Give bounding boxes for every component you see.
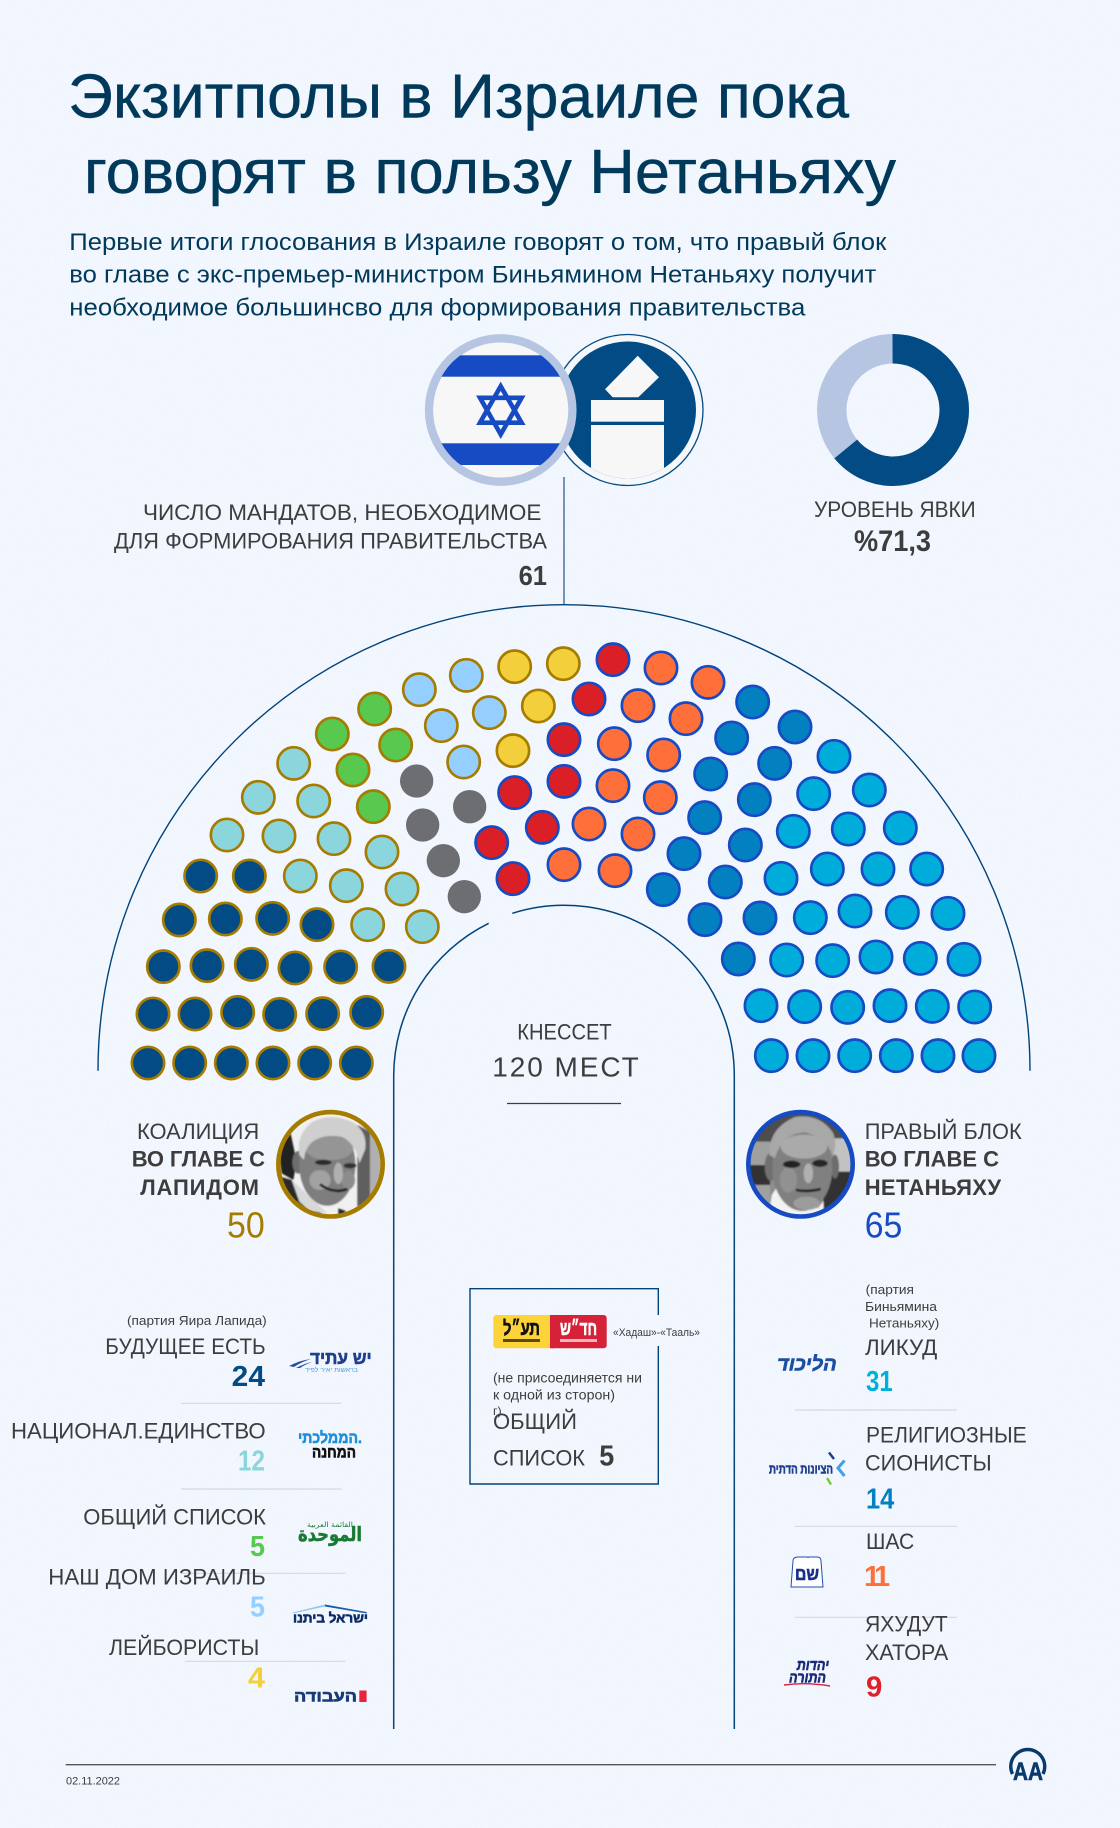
subtitle text: Первые итоги глосования в Израиле говорят о том, что правый блок [69,229,887,256]
right bloc text [865,1119,1022,1246]
seats: Likud [745,740,995,1072]
party: Likud: 31 [866,1366,893,1398]
party: Religious Zionists [769,1423,1027,1515]
seats: coalition [132,647,579,1079]
logo: Anadolu Agency [1011,1749,1045,1786]
title: Экзитполы в Израиле пока [68,62,850,131]
right bloc text: НЕТАНЬЯХУ [865,1175,1001,1200]
inner arch [394,905,734,1729]
panel: Hadash-Taal box [470,1289,700,1484]
party: Labor: ЛЕЙБОРИСТЫ [109,1635,259,1660]
box text: СПИСОК [493,1446,585,1471]
party: Yesh Atid: БУДУЩЕЕ ЕСТЬ [105,1334,266,1359]
logo: Raam: الموحدة [298,1522,362,1546]
seats: Labor [497,647,579,767]
subtitle text: необходимое большинсво для формирования правительства [69,294,806,322]
logo: Yisrael Beytenu: ישראל ביתנו [293,1611,368,1626]
box text: 5 [599,1441,614,1473]
subtitle text [69,229,887,322]
party: Yisrael Beytenu: 5 [250,1592,265,1624]
seats: Religious Zionists [647,686,811,975]
logo: Yesh Atid [289,1348,372,1374]
party: Religious Zionists: СИОНИСТЫ [865,1451,992,1476]
logo: UTJ: התורה [789,1669,826,1686]
party: Labor [109,1635,367,1706]
logo: National Unity: המחנה [312,1444,356,1462]
logo: Anadolu Agency: AA [1013,1758,1043,1786]
seats: Yesh Atid [132,860,405,1079]
party: Yisrael Beytenu [48,1565,368,1626]
icon: israeli flag [420,338,580,482]
logo: Yesh Atid: בראשות יאיר לפיד [305,1366,358,1374]
logo: Labor: העבודה [294,1689,357,1706]
box text [493,1370,642,1473]
logo: UTJ [784,1657,830,1686]
party: Shas: ШАС [866,1529,914,1554]
majority label: 61 [519,560,547,591]
party: Likud [777,1282,939,1398]
majority marker line [563,477,565,605]
outer hemicycle arc [98,605,1030,1071]
title [68,62,896,207]
turnout label: %71,3 [854,525,931,558]
majority label [114,500,547,591]
party: Yesh Atid [105,1313,372,1393]
party: Likud: Нетаньяху) [869,1316,939,1331]
majority label: ДЛЯ ФОРМИРОВАНИЯ ПРАВИТЕЛЬСТВА [114,528,547,553]
box text: ОБЩИЙ [493,1409,577,1434]
seats: Hadash-Taal grey [400,764,486,913]
party: Yisrael Beytenu: НАШ ДОМ ИЗРАИЛЬ [48,1565,266,1590]
logo: Hadash-Taal [493,1315,607,1348]
date: 02.11.2022 [66,1775,120,1787]
party: Shas: 11 [864,1561,890,1593]
party: UTJ: ХАТОРА [865,1640,949,1665]
title: говорят в пользу Нетаньяху [84,138,896,207]
right bloc text: ВО ГЛАВЕ С [865,1147,999,1172]
logo: Religious Zionists: הציונות הדתית [769,1462,833,1477]
knesset label: КНЕССЕТ [517,1019,612,1044]
party: Religious Zionists: 14 [866,1483,894,1515]
seats: National Unity [211,747,438,943]
party: UTJ: ЯХУДУТ [865,1612,948,1637]
right bloc text: 65 [865,1205,902,1246]
box text: к одной из сторон) [493,1386,615,1402]
knesset label: 120 МЕСТ [492,1051,639,1082]
coalition text [132,1119,265,1246]
party: Labor: 4 [248,1662,265,1694]
icon: ballot box [552,334,703,490]
box text: г) [493,1404,502,1418]
portrait: Lapid [276,1110,385,1219]
party: Likud: ЛИКУД [865,1335,937,1360]
panel: Hadash-Taal box: «Хадаш»-«Тааль» [613,1327,700,1339]
logo: Likud: הליכוד [777,1354,837,1376]
coalition text: КОАЛИЦИЯ [137,1119,259,1144]
party: Joint List [83,1505,362,1563]
seats: UTJ [476,643,629,895]
coalition text: ВО ГЛАВЕ С [132,1147,265,1172]
logo: Religious Zionists [769,1452,844,1484]
seats: Yisrael Beytenu [403,659,505,778]
footer rule [66,1764,996,1766]
box text: (не присоединяется ни [493,1370,642,1386]
party: Yesh Atid: 24 [232,1361,265,1393]
logo: Hadash-Taal: חד״ש [560,1318,597,1340]
party: National Unity: НАЦИОНАЛ.ЕДИНСТВО [11,1418,266,1443]
right bloc text: ПРАВЫЙ БЛОК [865,1119,1022,1144]
panel: coalition leader [133,1110,385,1238]
coalition text: 50 [227,1205,265,1246]
logo: National Unity: הממלכתי. [298,1429,362,1447]
party: Likud: (партия [866,1282,914,1297]
party: National Unity: 12 [238,1446,265,1478]
party: Religious Zionists: РЕЛИГИОЗНЫЕ [866,1423,1027,1448]
logo: Hadash-Taal: תע״ל [503,1318,540,1340]
seats: right bloc [476,643,995,1072]
logo: Yesh Atid: יש עתיד [310,1348,372,1368]
majority label: ЧИСЛО МАНДАТОВ, НЕОБХОДИМОЕ [143,500,541,525]
party: Joint List: ОБЩИЙ СПИСОК [83,1505,266,1530]
party: Yesh Atid: (партия Яира Лапида) [127,1313,267,1328]
turnout label [814,497,976,558]
seats: Joint List green [316,693,412,823]
party: National Unity [11,1418,362,1478]
coalition text: ЛАПИДОМ [140,1175,259,1200]
party: UTJ: 9 [866,1672,882,1704]
panel: right bloc leader [746,1110,1022,1238]
logo: National Unity [298,1429,362,1462]
party: UTJ [784,1612,949,1704]
chart: turnout donut [832,349,954,471]
party: Shas [791,1529,914,1593]
seats: Shas [548,652,724,887]
portrait: Netanyahu [746,1110,855,1219]
logo: Shas: שם [795,1564,819,1584]
logo: Raam: القائمة العربية [307,1521,353,1529]
turnout label: УРОВЕНЬ ЯВКИ [814,497,976,522]
party: Likud: Биньямина [865,1299,938,1314]
party: Joint List: 5 [250,1531,265,1563]
knesset label [492,1019,639,1104]
logo: UTJ: יהדות [796,1657,829,1674]
subtitle text: во главе с экс-премьер-министром Биньямином Нетаньяху получит [69,262,876,289]
